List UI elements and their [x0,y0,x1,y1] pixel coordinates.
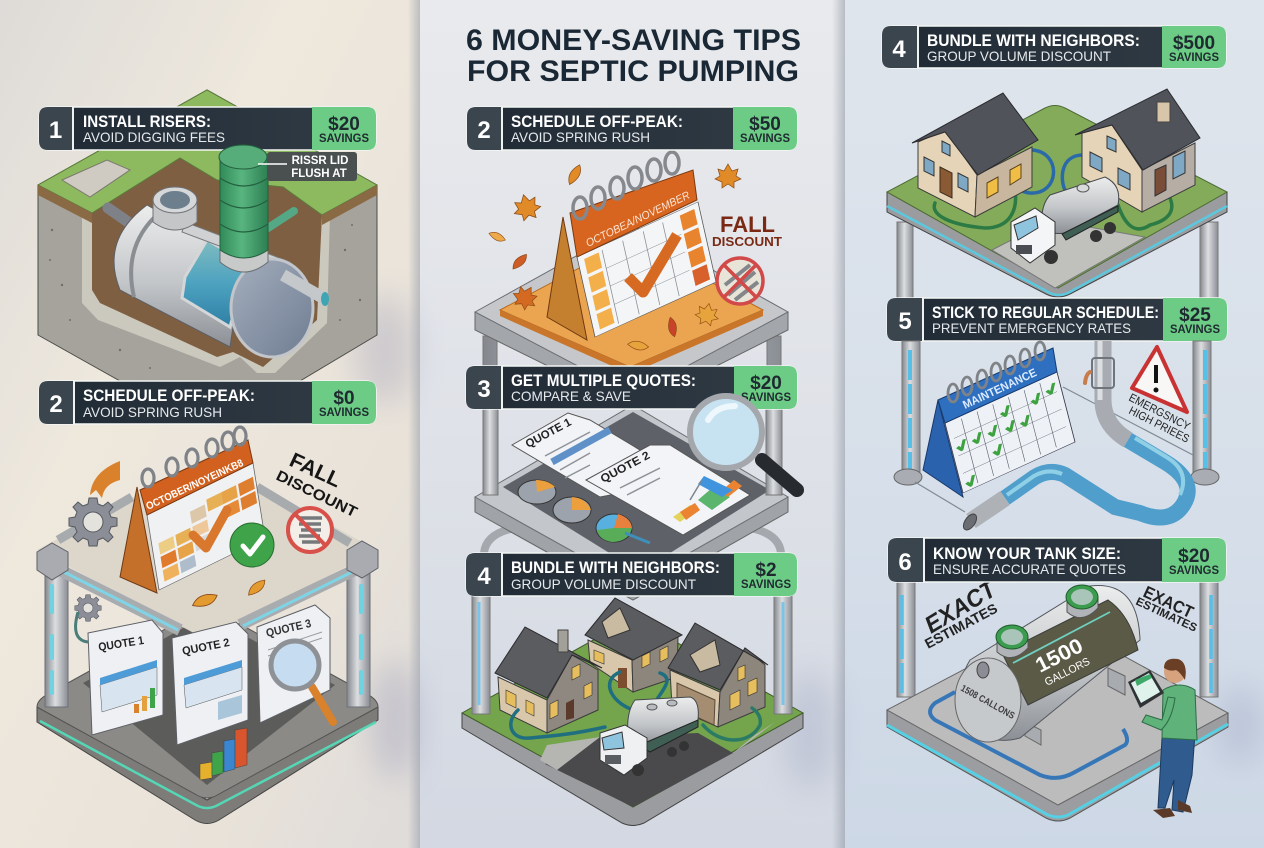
illustration: calendar and quotes on two-level platform [37,427,378,824]
curved struts [484,527,781,553]
title: FOR SEPTIC PUMPING [467,55,799,88]
header: tip 3 get multiple quotes: COMPARE & SAVE [511,388,631,404]
calendar back stand [120,487,157,593]
gallon labels: GALLORS [1043,656,1092,689]
header: tip 4 bundle (center): GROUP VOLUME DISCOUNT [511,576,696,592]
left pillar [45,563,68,707]
calendar rings [142,427,246,487]
callout: riser lid [258,152,357,181]
access lid [62,160,130,197]
right house [1075,89,1200,212]
left support [897,222,913,298]
left pillar glow [479,602,783,705]
header: tip 6 know tank size: ENSURE ACCURATE QUOTES [933,561,1126,577]
quote 1 sheet: QUOTE 1 [98,635,145,654]
bar chart figure [200,728,247,780]
header: tip 5 regular schedule: $25 [1179,305,1211,326]
title [466,24,801,88]
illustration: quotes on steel tray [475,405,797,600]
illustration: two houses and pump truck [887,89,1227,298]
pipe leak [1085,372,1090,383]
outlet pipe opening [321,292,329,306]
header: tip 2 schedule off-peak [467,107,797,150]
header: panel 1 tip 2 schedule off-peak: SAVINGS [319,407,369,419]
header: tip 1 install risers: SAVINGS [319,133,369,145]
header: panel 1 tip 2 schedule off-peak [39,381,376,424]
left house [495,627,602,733]
fall discount label: FALL [720,212,775,237]
pipe opening [961,512,979,532]
header: tip 4 bundle (right): SAVINGS [1169,52,1219,64]
pipe silver end [971,498,1005,521]
exact estimates left label: EXACT [920,575,1003,639]
technician figure [1128,659,1197,818]
header: panel 1 tip 2 schedule off-peak: SCHEDULE OFF-PEAK: [83,387,255,405]
header: tip 4 bundle (center): SAVINGS [741,579,791,591]
table top [475,225,788,395]
tank body [114,205,243,347]
illustration: measured tank and technician [887,575,1228,821]
header: tip 4 bundle (center): BUNDLE WITH NEIGHBORS: [511,559,720,577]
tank neck [153,187,197,230]
right pillar [1200,582,1218,697]
base side [462,713,803,826]
quote 1 document: QUOTE 1 [524,416,574,451]
cable [76,612,88,642]
calendar blue band [938,348,1057,423]
dark inlay [503,412,770,572]
side strip [540,737,600,770]
big gear [69,498,117,546]
magnifier handle [762,460,797,490]
header: tip 5 regular schedule [887,298,1227,341]
header: tip 5 regular schedule: PREVENT EMERGENCY RATES [932,320,1131,336]
tank band left [131,212,160,297]
green port 2 [1066,585,1098,618]
callout: riser lid: FLUSH AT [291,168,347,180]
header: tip 1 install risers [39,107,376,150]
calendar back stand [547,217,587,340]
quote 2 sheet [172,622,248,745]
tank end cap [955,658,1021,742]
calendar page [945,372,1075,493]
table side [475,312,788,408]
small gear [75,595,101,621]
base side [887,710,1228,821]
header: tip 2 schedule off-peak: 2 [477,117,491,144]
upper deck [37,457,377,640]
pump truck [600,697,698,776]
gallon labels [1032,634,1092,689]
left pillar [483,409,498,495]
base side [37,707,378,824]
header: tip 6 know tank size: SAVINGS [1169,565,1219,577]
pie chart 1 [518,480,556,504]
header: panel 1 tip 2 schedule off-peak: 2 [49,391,63,418]
header: tip 3 get multiple quotes: $20 [750,373,782,394]
hoses [511,672,760,740]
tank water window [182,240,247,327]
end cap valve [977,662,989,678]
header: tip 2 schedule off-peak: SAVINGS [740,133,790,145]
right strip [733,722,775,753]
back beams [58,487,350,543]
beam glow [62,571,352,630]
quote 3 sheet: QUOTE 3 [265,618,312,640]
hoses [934,150,1172,229]
pipe collar [1092,358,1114,388]
calendar back stand [923,400,963,497]
left pillar [472,596,490,714]
inlet stub pipe [108,208,128,222]
driveway [545,733,733,807]
left house [912,93,1038,217]
callout: riser lid: RISSR LID [292,155,348,167]
left corner block [37,543,68,580]
warning triangle [1132,347,1187,412]
falling leaves [488,163,741,352]
orange check mark [193,510,227,548]
tank legs [1025,668,1125,745]
pipe blue section [1005,440,1188,518]
header: tip 4 bundle (center) [466,553,797,596]
header: tip 3 get multiple quotes [466,366,797,409]
base top [37,609,378,798]
base glow [887,206,1227,295]
calendar month text: OCTOBEA/NOVEMBER [584,189,692,250]
pipe silver section [1103,341,1128,440]
green lawn [462,618,803,807]
quote 2 document [586,445,750,535]
lawn [887,106,1227,288]
orange check mark [628,235,677,292]
right pillar [766,409,782,495]
pump truck [1011,177,1119,264]
illustration: fall calendar on steel table [475,152,788,408]
illustration: maintenance calendar and pipe [894,341,1219,532]
tank body [959,585,1140,740]
right pillar [1191,341,1219,485]
table legs [483,336,781,366]
right house [668,623,768,727]
calendar maintenance text: MAINTENANCE [961,367,1039,412]
header: panel 1 tip 2 schedule off-peak: AVOID SPRING RUSH [83,404,222,420]
blue hose [930,692,1127,778]
calendar orange band [570,170,697,257]
exact estimates right label: ESTIMATES [1134,596,1199,635]
emergency label: EMERGSNCY [1127,392,1192,433]
header: tip 1 install risers: $20 [328,114,360,135]
gallon labels: 1500 [1032,634,1087,677]
outlet pipe [283,275,325,299]
tank end cap [231,259,313,357]
header: tip 3 get multiple quotes: 3 [477,376,491,403]
fall discount label [712,212,782,249]
illustration: three houses and pump truck [462,596,803,826]
no-money icon [717,258,763,304]
header: tip 4 bundle (right): BUNDLE WITH NEIGHBORS: [927,32,1140,50]
riser collar [220,246,268,272]
header: tip 6 know tank size: KNOW YOUR TANK SIZE: [933,545,1121,563]
driveway [992,220,1145,288]
tray top [475,405,788,585]
orange mat [500,240,763,367]
tray side [475,497,788,600]
header: tip 1 install risers: AVOID DIGGING FEES [83,129,225,145]
base glow [887,724,1228,817]
header: tip 2 schedule off-peak: $50 [749,114,781,135]
header: tip 4 bundle (center): 4 [477,563,491,590]
quote 1 sheet [88,620,163,735]
floor line [915,387,1193,512]
right pillar [774,596,792,714]
lighter concrete lining [82,180,330,373]
magnifier [271,641,333,722]
front right beam [240,565,365,625]
header: tip 4 bundle (right) [882,26,1226,68]
green check badge [230,523,274,567]
tank top strap [182,222,290,268]
emergency label: HIGH PRIEES [1127,405,1191,446]
right corner block [347,541,378,578]
grass lawn [38,90,377,215]
base dark inlay [83,615,335,785]
base side [887,192,1227,297]
header: tip 5 regular schedule: STICK TO REGULAR SCHEDULE: [932,304,1159,322]
header: tip 4 bundle (right): GROUP VOLUME DISCOUNT [927,48,1111,64]
soil pocket [92,158,322,367]
concrete speckle [49,224,361,369]
mat thickness [500,310,763,374]
header: tip 1 install risers: INSTALL RISERS: [83,113,211,131]
header: panel 1 tip 2 schedule off-peak: $0 [333,388,355,409]
quote 2 document: QUOTE 2 [599,450,652,486]
illustration: septic tank cutaway [38,90,377,381]
pipe highlight [1098,341,1102,400]
pipe blue highlight [1007,438,1183,495]
fall discount label: FALL [286,449,345,492]
header: tip 6 know tank size [888,538,1226,582]
calendar page [147,463,265,590]
right pillar [347,563,370,707]
exact estimates right label: EXACT [1140,582,1197,622]
soil edge under grass [38,185,377,225]
header: tip 5 regular schedule: 5 [898,308,912,335]
header: tip 2 schedule off-peak: AVOID SPRING RUSH [511,129,650,145]
calendar rings [573,152,679,219]
header: tip 5 regular schedule: SAVINGS [1170,324,1220,336]
base top [887,620,1228,805]
green outlet pipe [268,211,294,228]
quote 3 sheet [257,605,330,723]
base glow strip [40,721,376,808]
quote 2 sheet: QUOTE 2 [181,637,231,658]
front left beam [50,565,180,630]
header: tip 3 get multiple quotes: SAVINGS [741,392,791,404]
calendar month text: OCTOBER/NOYEINKB8 [144,457,245,513]
header: tip 4 bundle (right): $500 [1173,33,1215,54]
header: tip 6 know tank size: $20 [1178,546,1210,567]
green port 1 [996,625,1028,658]
header: tip 2 schedule off-peak: SCHEDULE OFF-PEAK: [511,113,683,131]
fall discount label [273,449,360,521]
leaves [191,578,268,609]
title: 6 MONEY-SAVING TIPS [466,24,801,57]
fall discount label: DISCOUNT [712,234,782,249]
green riser [219,145,268,258]
end cap text: 1508 CALLONS [959,683,1016,722]
header: tip 6 know tank size: 6 [898,549,912,576]
header: tip 3 get multiple quotes: GET MULTIPLE QUOTES: [511,372,696,390]
measure arrow [1013,612,1110,663]
calendar rings [948,342,1045,402]
no-coins icon [288,508,332,552]
header: tip 4 bundle (right): 4 [892,36,906,63]
header: tip 4 bundle (center): $2 [755,560,777,581]
left pillar [894,341,922,485]
header: tip 1 install risers: 1 [49,117,62,144]
quote 1 document [512,413,690,497]
right support [1200,222,1218,298]
exact estimates left label: ESTIMATES [922,600,1000,652]
tank window [1002,600,1138,705]
left pillar [897,582,915,697]
concrete block [38,90,377,381]
pie chart 2 [553,497,591,523]
fall discount label: DISCOUNT [273,467,360,521]
middle house [585,598,682,692]
calendar orange band [140,440,253,515]
magnifier lens over header [690,396,762,468]
pie chart 3 [596,514,650,543]
orange arrow [90,461,120,498]
calendar page [577,202,716,337]
